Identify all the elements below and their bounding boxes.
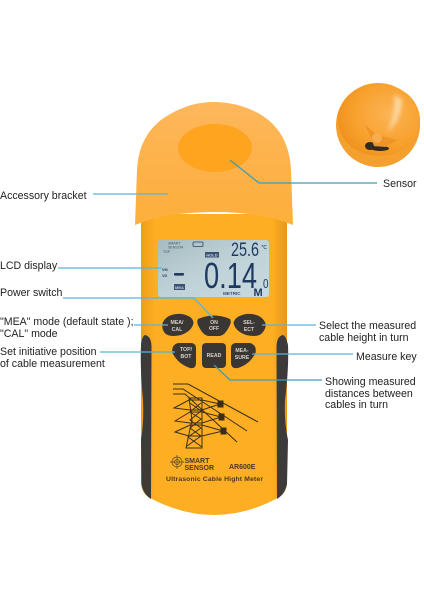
brand name: SENSOR — [184, 465, 214, 472]
callout: select cable height: cable height in turn — [319, 332, 409, 344]
callout: set initiative position: Set initiative position — [0, 346, 97, 358]
callout: set initiative position: of cable measurement — [0, 358, 105, 370]
LCD degree unit: ℃ — [261, 245, 268, 251]
LCD display: SENSOR — [168, 246, 184, 250]
button: MEA/CAL — [162, 314, 194, 336]
sensor detail image — [336, 83, 420, 167]
LCD main reading: 0.14 — [204, 255, 257, 296]
callout: measured distances — [214, 365, 416, 411]
device body — [141, 214, 287, 515]
callout: set initiative position — [0, 346, 175, 370]
LCD VM and VD labels: VM — [162, 268, 168, 272]
button: SEL-ECT — [234, 314, 266, 336]
button: ON/OFF: OFF — [209, 326, 219, 332]
button: MEASURE: SURE — [235, 355, 250, 361]
sensor bowl interior — [338, 84, 420, 156]
callout: select cable height — [262, 320, 416, 344]
button: READ — [202, 343, 226, 368]
LCD brand text: SMART — [168, 242, 181, 246]
button: SEL-ECT: ECT — [244, 327, 255, 333]
button: ON/OFF — [197, 316, 231, 336]
LCD VM and VD labels — [162, 268, 168, 278]
button: SEL-ECT: SEL- — [243, 320, 255, 326]
sensor opening — [178, 124, 252, 172]
LCD display — [158, 240, 269, 299]
callout: measure key: Measure key — [356, 351, 417, 363]
button: MEASURE — [231, 343, 256, 368]
callout: MEA CAL mode: "CAL" mode — [0, 328, 58, 340]
callout: MEA CAL mode — [0, 316, 168, 340]
button: ON/OFF: ON — [210, 320, 218, 326]
callout: LCD display: LCD display — [0, 260, 58, 272]
brand logo — [170, 455, 184, 469]
callout: sensor: Sensor — [383, 178, 417, 190]
brand name: SMART — [184, 458, 210, 465]
sensor highlight — [387, 94, 402, 132]
callout: measured distances: distances between — [325, 388, 413, 400]
LCD temperature: 25.6 — [231, 240, 259, 261]
callout: MEA CAL mode: "MEA" mode (default state ); — [0, 316, 134, 328]
device: cable height meter — [135, 102, 293, 515]
callout: measured distances: Showing measured — [325, 376, 416, 388]
button: TOP/BOT: BOT — [181, 354, 192, 360]
button: TOP/BOT — [172, 343, 196, 368]
callout: accessory bracket: Accessory bracket — [0, 190, 87, 202]
right grip — [276, 335, 288, 499]
LCD metric label: METRIC — [223, 291, 241, 296]
callout: power switch: Power switch — [0, 287, 63, 299]
power tower illustration — [173, 384, 258, 448]
button: TOP/BOT: TOP/ — [180, 347, 193, 353]
callout: sensor — [230, 160, 417, 190]
LCD HOLD flag: HOLD — [206, 252, 218, 257]
model number: AR600E — [229, 464, 256, 471]
LCD VM and VD labels: VD — [162, 274, 168, 278]
button: MEASURE: MEA- — [235, 348, 249, 354]
callout: measured distances: cables in turn — [325, 399, 388, 411]
product name: Ultrasonic Cable Hight Meter — [166, 476, 263, 483]
sensor fan — [365, 125, 398, 151]
button: READ: READ — [207, 353, 222, 359]
button: MEA/CAL: CAL — [172, 327, 183, 333]
callout: power switch — [0, 287, 213, 318]
LCD TOP marker: TOP — [163, 250, 171, 254]
callout: select cable height: Select the measured — [319, 320, 416, 332]
LCD dash — [174, 273, 184, 276]
left grip — [141, 335, 152, 499]
LCD metre unit: M — [254, 287, 263, 299]
LCD MEA flag: MEA — [175, 285, 184, 290]
button: MEA/CAL: MEA/ — [171, 320, 184, 326]
accessory bracket cap — [135, 102, 293, 225]
brand name — [184, 458, 214, 472]
LCD battery — [193, 242, 203, 246]
LCD small digit: 0 — [263, 276, 268, 291]
